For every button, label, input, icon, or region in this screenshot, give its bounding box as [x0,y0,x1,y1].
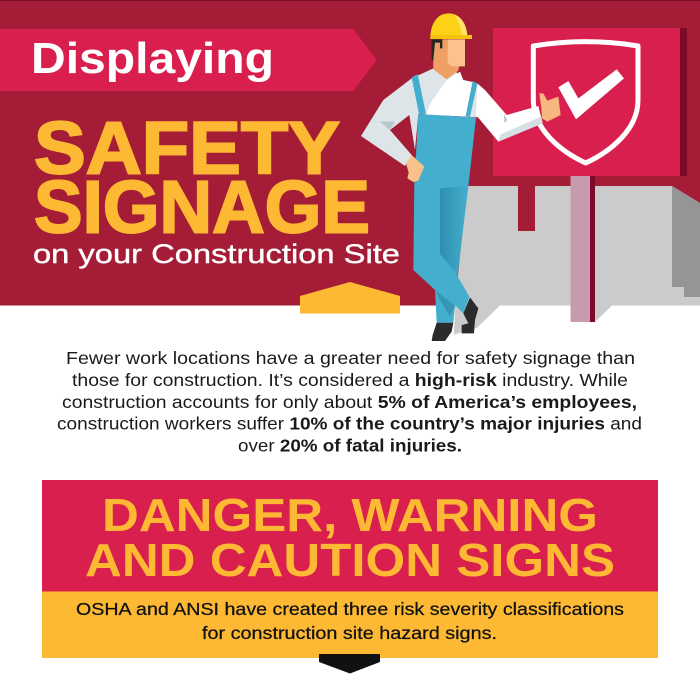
shoe back [432,323,453,341]
panel: hero background [0,0,700,306]
banner: Displaying: Displaying [31,34,274,83]
title [33,106,400,269]
banner: Displaying [0,29,377,91]
head [432,39,465,66]
intro paragraph: those for construction. It’s considered a high-risk industry. While [72,370,628,390]
icon: black down arrow [319,654,380,674]
thumbs-up hand [539,93,561,122]
right arm [476,83,543,142]
shirt chest [426,72,473,116]
panel: classification note: OSHA and ANSI have created three risk severity classifications [76,599,624,619]
intro paragraph [57,348,642,456]
icon: yellow up arrow [300,282,400,314]
panel: classification note [42,592,658,658]
sign post [570,176,595,322]
neck [433,62,460,79]
panel: classification note: for construction site hazard signs. [202,623,497,643]
title: on your Construction Site [33,239,400,269]
icon: shield with check mark [533,42,638,163]
panel: section heading: AND CAUTION SIGNS [85,534,615,586]
intro paragraph: Fewer work locations have a greater need for safety signage than [66,348,635,368]
building backdrop [454,186,700,334]
hard hat [430,13,472,39]
panel: section heading: DANGER, WARNING [102,489,598,541]
intro paragraph: over 20% of fatal injuries. [238,436,462,456]
shoe front [462,297,478,333]
title: SAFETY [34,106,340,190]
title: SIGNAGE [34,166,370,248]
worker figure [361,13,561,341]
overalls [412,74,477,323]
left hand [406,155,424,182]
shirt and left arm [361,68,479,166]
intro paragraph: construction workers suffer 10% of the country’s major injuries and [57,414,642,434]
panel: section heading [42,480,658,592]
sign board [493,28,687,176]
intro paragraph: construction accounts for only about 5% of America’s employees, [62,392,637,412]
elbow shading [380,121,395,130]
